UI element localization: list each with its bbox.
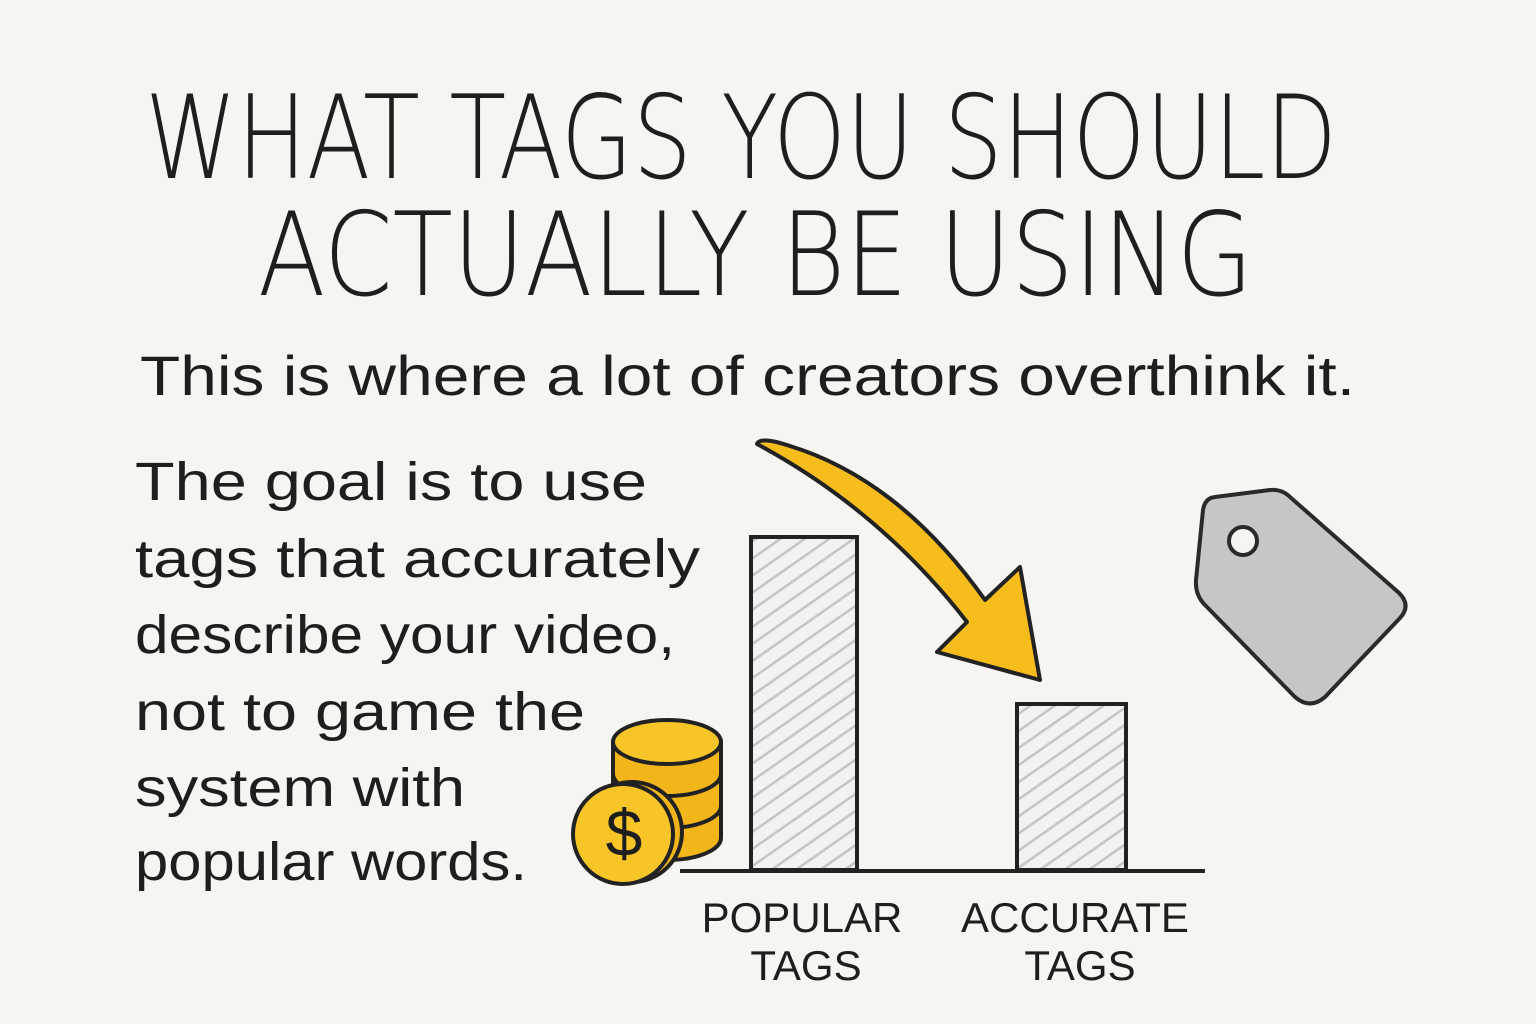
body text: The goal is to use <box>135 452 647 512</box>
label: popular tags <box>702 894 902 989</box>
icon: coins <box>573 720 721 884</box>
icon: coins: $ <box>606 796 642 870</box>
label: accurate tags <box>961 894 1189 989</box>
label: popular tags: POPULAR <box>702 894 902 941</box>
arrow <box>757 440 1040 680</box>
icon: price tag <box>1196 490 1406 704</box>
body text <box>135 452 700 892</box>
bar chart <box>680 537 1205 989</box>
body text: popular words. <box>135 832 527 892</box>
label: accurate tags: TAGS <box>1024 942 1136 989</box>
title: ACTUALLY BE USING <box>258 188 1253 323</box>
body text: describe your video, <box>135 605 675 665</box>
label: accurate tags: ACCURATE <box>961 894 1189 941</box>
body text: not to game the <box>135 682 585 742</box>
title <box>145 71 1337 323</box>
bar: popular tags <box>751 537 857 870</box>
body text: tags that accurately <box>135 529 700 589</box>
body text: system with <box>135 758 465 818</box>
bar: accurate tags <box>1017 704 1126 870</box>
label: popular tags: TAGS <box>750 942 862 989</box>
subtitle: This is where a lot of creators overthink it. <box>140 344 1355 407</box>
